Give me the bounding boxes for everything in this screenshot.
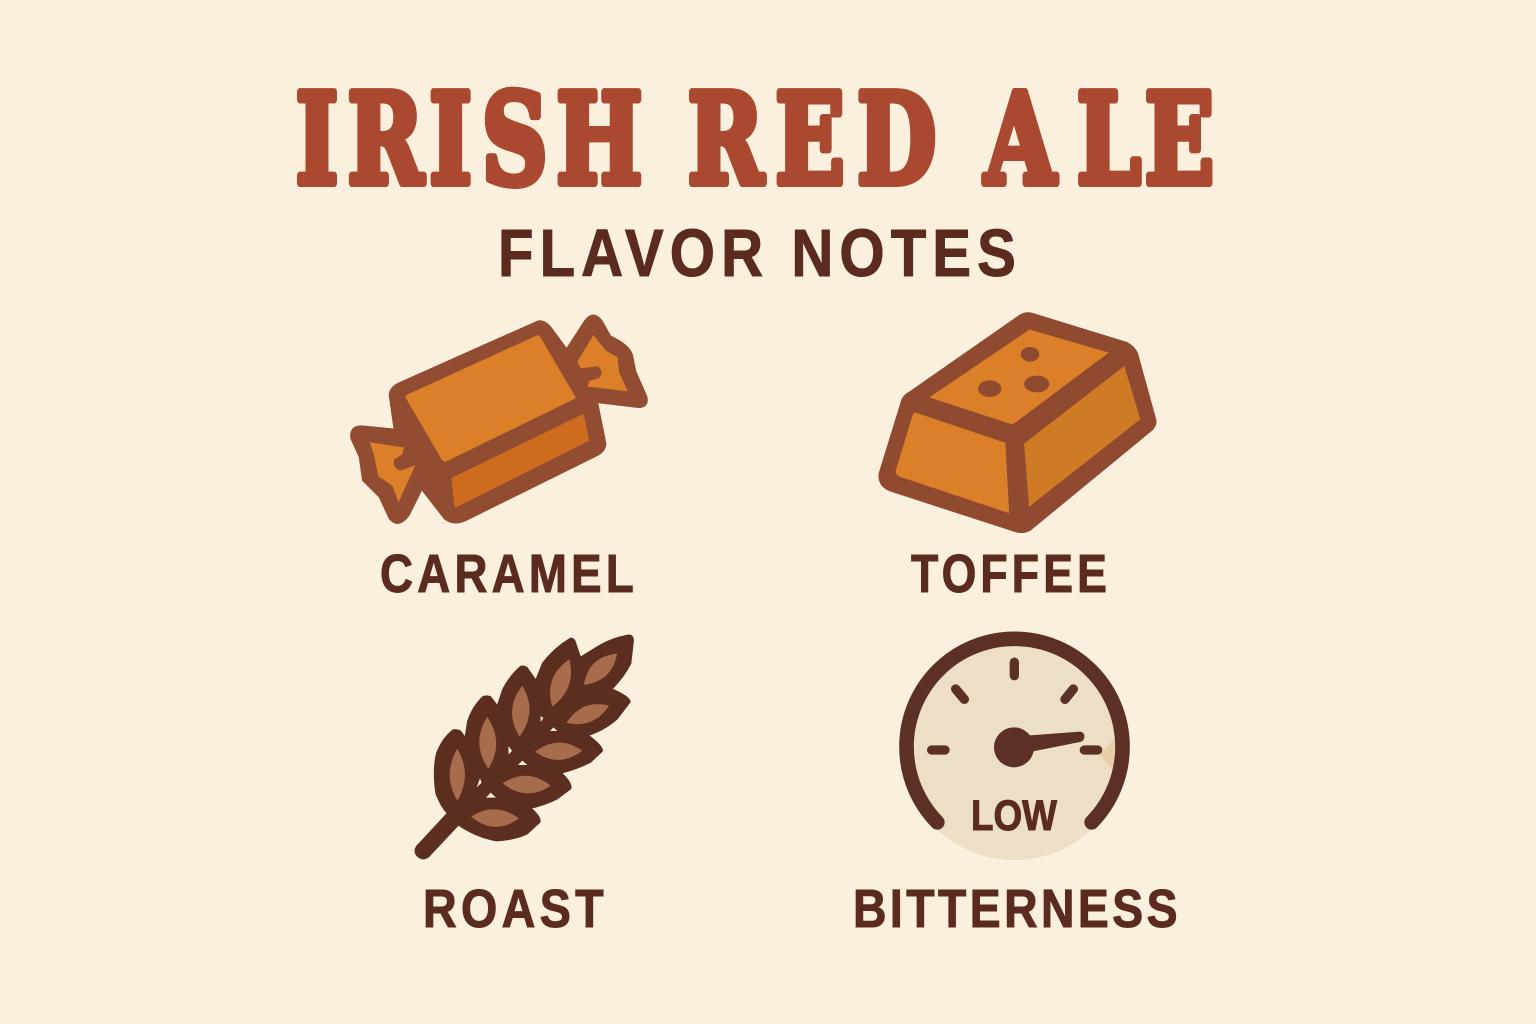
icon: bitterness gauge (901, 633, 1128, 860)
gauge label: LOW (971, 792, 1057, 840)
title: IRISH RED ALE (296, 65, 1214, 213)
label: toffee: TOFFEE (911, 544, 1111, 604)
label: caramel: CARAMEL (380, 544, 638, 604)
subtitle: FLAVOR NOTES (498, 216, 1022, 291)
label: bitterness: BITTERNESS (853, 879, 1181, 939)
icon: caramel candy (351, 316, 646, 523)
icon: wheat roast (416, 636, 633, 858)
icon: toffee block (880, 314, 1155, 532)
label: roast: ROAST (423, 879, 608, 939)
